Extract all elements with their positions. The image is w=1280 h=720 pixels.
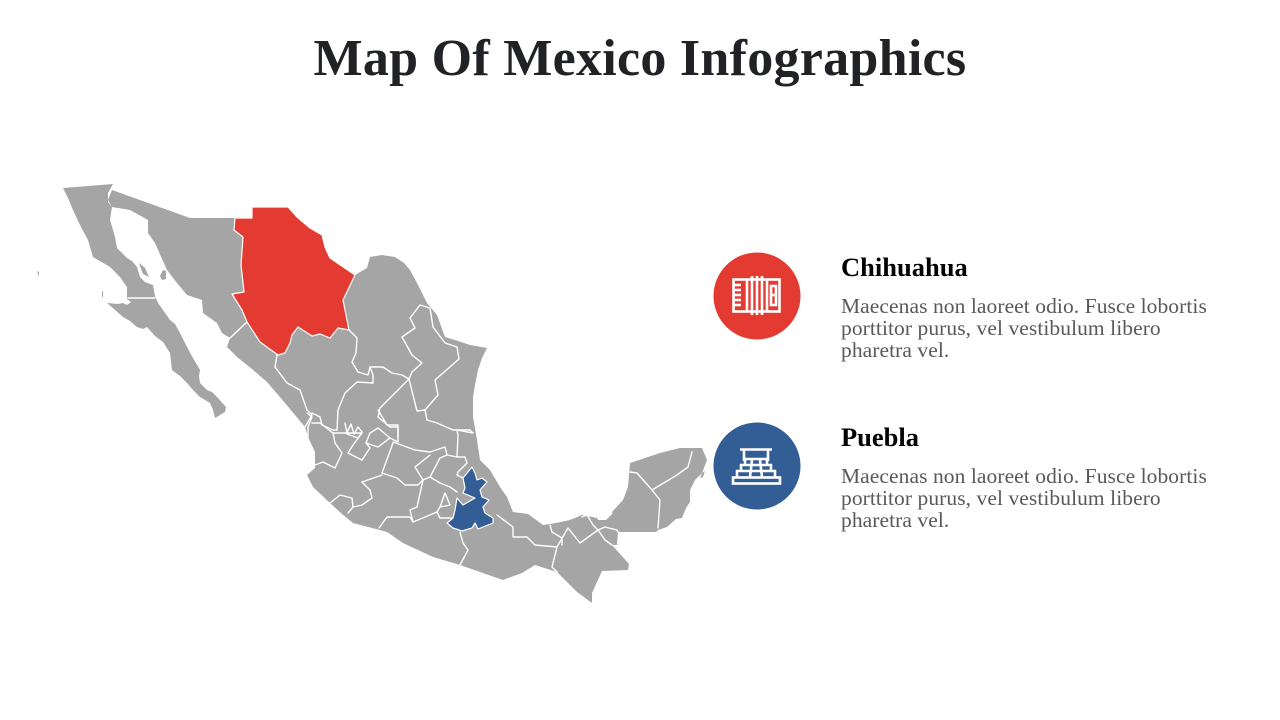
- text: Puebla description: Maecenas non laoreet odio. Fusce lobortis: [841, 464, 1207, 488]
- region: Terminos lagoon: [597, 511, 613, 520]
- text: Puebla description: porttitor purus, vel vestibulum libero: [841, 486, 1161, 510]
- region: Mexico mainland: [108, 190, 707, 603]
- text: Chihuahua description: porttitor purus, vel vestibulum libero: [841, 316, 1161, 340]
- region: Puebla (highlighted): [447, 467, 493, 531]
- heading: Chihuahua: Chihuahua: [841, 252, 968, 282]
- text: Chihuahua description: Maecenas non laoreet odio. Fusce lobortis: [841, 294, 1207, 318]
- region: Baja California peninsula: [37, 184, 705, 478]
- text: Puebla description: pharetra vel.: [841, 508, 949, 532]
- text: Chihuahua description: [841, 294, 1207, 362]
- heading: Puebla: Puebla: [841, 422, 919, 452]
- title: Map Of Mexico Infographics: [314, 30, 966, 87]
- text: Chihuahua description: pharetra vel.: [841, 338, 949, 362]
- state borders: [128, 298, 692, 572]
- region: Chihuahua (highlighted): [232, 207, 355, 355]
- text: Puebla description: [841, 464, 1207, 532]
